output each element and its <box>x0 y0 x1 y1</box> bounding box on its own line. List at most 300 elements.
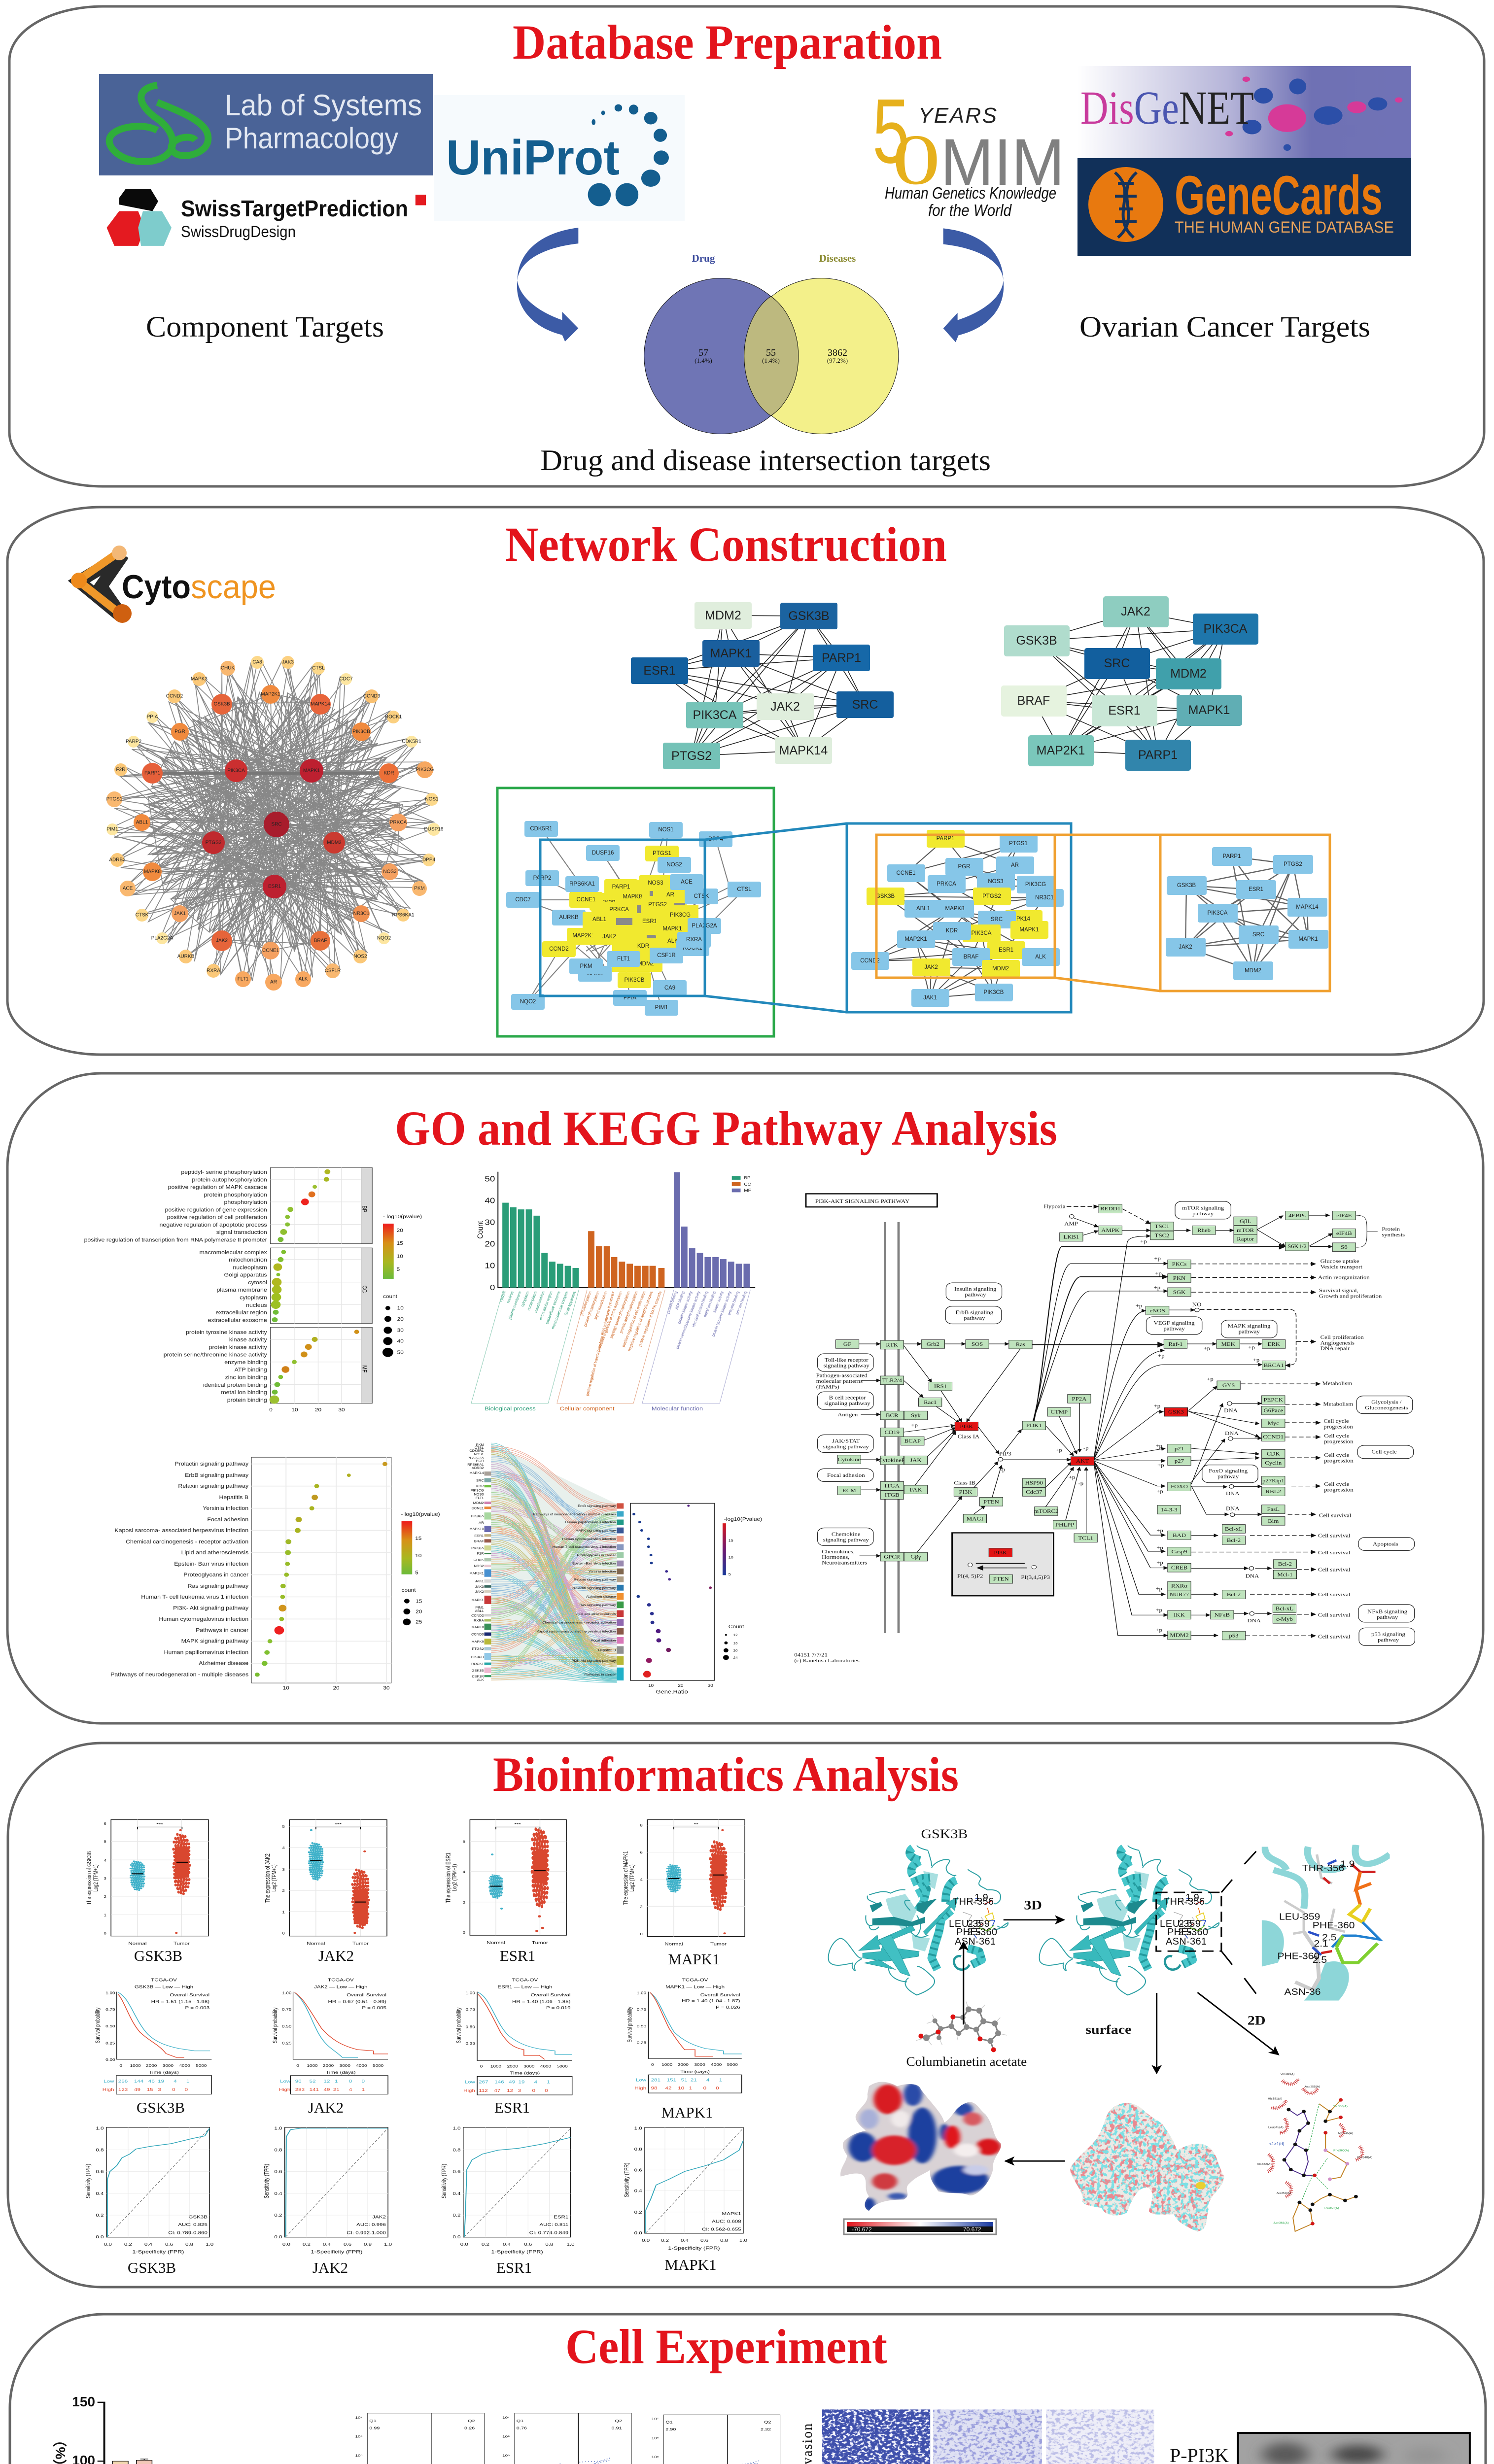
chart: KEGG sankey and dot plot: Pathways of neurodegeneration - multiple diseases <box>533 1513 616 1516</box>
group: KEGG outcome labels: +p <box>1157 1463 1164 1468</box>
chart: flow cytometry plot 2: 10⁷ <box>502 2416 510 2420</box>
chart: GO bar chart: 30 <box>485 1218 495 1227</box>
protein: GSK3B cartoon docked: 1.9 <box>1185 1892 1199 1903</box>
protein: GSK3B cartoon left: PHE-360 <box>956 1927 997 1938</box>
chart: ROC curve MAPK1: MAPK1 <box>722 2212 741 2217</box>
chart: KEGG sankey and dot plot: MAPK8 <box>471 1626 484 1629</box>
group: KEGG outcome labels: +p <box>911 1423 918 1428</box>
chart: mid MCODE network in blue box: BRAF <box>964 954 978 960</box>
group: KEGG outcome labels: Vesicle transport <box>1320 1264 1363 1270</box>
chart: top ten hub network A: PTGS2 <box>671 749 712 763</box>
chart: GO bar chart: Molecular function <box>652 1405 703 1412</box>
chart: GO bubble plot: nucleus <box>246 1302 267 1308</box>
chart: GO bar chart: zinc ion binding <box>734 1291 748 1315</box>
group: KEGG signaling nodes: Bcl-2 <box>1227 1538 1241 1543</box>
group: KEGG outcome labels: Cell cycle <box>1323 1418 1349 1424</box>
chart: full MCODE network in green box: GSK3B <box>597 900 616 906</box>
chart: GO bubble plot: MF <box>361 1366 367 1372</box>
chart: full MCODE network in green box: RXRA <box>686 937 702 943</box>
chart: ROC curve MAPK1: 0.4 <box>681 2238 689 2243</box>
chart: circular PPI network: PGR <box>174 729 185 734</box>
group: KEGG linked pathway boxes: MAPK signaling <box>1228 1323 1271 1329</box>
chart: ROC curve ESR1: 1.0 <box>452 2126 461 2131</box>
chart: flow cytometry plot 3: 10⁵ <box>652 2456 659 2459</box>
chart: ROC curve GSK3B: 0.2 <box>96 2213 104 2218</box>
chart: KEGG sankey and dot plot: Alzheimer disease <box>586 1596 616 1599</box>
legend: electrostatic potential scale: 70.672 <box>963 2226 981 2233</box>
chart: expression scatter JAK2: 1 <box>282 1910 285 1914</box>
group: KEGG outcome labels: PIP3 <box>999 1451 1011 1457</box>
group: KEGG signaling nodes: HSP90 <box>1025 1480 1043 1486</box>
chart: ROC curve JAK2: 1.0 <box>274 2126 282 2131</box>
chart: full MCODE network in green box: ALK <box>667 938 678 944</box>
group: KEGG signaling nodes: MEK <box>1221 1341 1236 1347</box>
group: KEGG outcome labels: +p <box>1154 1285 1160 1291</box>
protein: GSK3B cartoon left: ASN-361 <box>955 1936 996 1947</box>
protein: GSK3B cartoon docked <box>1040 1846 1219 1995</box>
chart: circular PPI network: CDK5R1 <box>402 739 421 744</box>
chart: survival curve MAPK1: Low <box>636 2078 647 2083</box>
captions: gene names under plots: ESR1 <box>500 1947 535 1964</box>
chart: survival curve JAK2: 3000 <box>340 2063 350 2067</box>
group: KEGG signaling nodes: Raf-1 <box>1168 1341 1183 1347</box>
chart: KEGG sankey and dot plot <box>467 1443 762 1695</box>
group: KEGG outcome labels: +p <box>1156 1488 1163 1494</box>
chart: circular PPI network: CSF1R <box>325 968 341 974</box>
group: KEGG signaling nodes: Raptor <box>1237 1236 1254 1242</box>
arrow: disease targets to venn <box>943 228 1004 342</box>
chart: flow cytometry plot 2: 10⁶ <box>502 2435 510 2438</box>
group: KEGG linked pathway boxes: pathway <box>1164 1326 1185 1332</box>
group: KEGG outcome labels: Angiogenesis <box>1320 1340 1355 1346</box>
chart: full MCODE network in green box: ABL1 <box>592 917 606 923</box>
group: KEGG signaling nodes: MDM2 <box>1170 1633 1189 1638</box>
chart: KEGG sankey and dot plot: GSK3B <box>472 1670 484 1673</box>
chart: survival curve GSK3B: GSK3B — Low — High <box>135 1985 193 1989</box>
legend: GO p-value and count: 10 <box>397 1305 404 1311</box>
chart: full MCODE network in green box: FLT1 <box>617 956 630 962</box>
chart: KEGG sankey and dot plot: Kaposi sarcoma-associated herpesvirus infection <box>537 1630 616 1633</box>
chart: expression scatter GSK3B: 3 <box>104 1876 106 1881</box>
chart: expression scatter ESR1: 6 <box>463 1840 465 1844</box>
group: KEGG outcome labels: +p <box>1156 1528 1163 1534</box>
group: KEGG outcome labels: Hypoxia <box>1044 1204 1066 1209</box>
legend: GO p-value and count: 15 <box>397 1241 403 1246</box>
diagram: LigPlot 2D interactions: Val348(A) <box>1281 2073 1295 2076</box>
chart: mid MCODE network in blue box: ALK <box>1035 954 1046 960</box>
chart: full MCODE network in green box: MAPK1 <box>662 926 682 932</box>
group: KEGG signaling nodes: p27 <box>1175 1458 1184 1464</box>
chart: survival curve ESR1: P = 0.019 <box>546 2006 571 2010</box>
chart: circular PPI network: PTGS2 <box>206 840 222 846</box>
chart: GO bubble plot: extracellular region <box>215 1310 267 1316</box>
protein: GSK3B cartoon left: 1.9 <box>974 1892 988 1903</box>
chart: KEGG sankey and dot plot: PKM <box>476 1444 484 1447</box>
captions: gene names under plots: ESR1 <box>496 2259 532 2276</box>
chart: GO bar chart: mitochondrion <box>533 1291 546 1313</box>
arrow: component targets to venn <box>517 228 578 342</box>
chart: ROC curve MAPK1: 0.6 <box>634 2168 642 2173</box>
chart: ROC curve MAPK1: AUC: 0.608 <box>712 2220 741 2224</box>
chart: expression scatter GSK3B: 4 <box>104 1858 106 1862</box>
chart: core network in orange box: PIK3CA <box>1208 910 1228 916</box>
chart: ROC curve MAPK1: Sensitivity (TPR) <box>624 2162 630 2197</box>
chart: GO bubble plot: positive regulation of cell proliferation <box>167 1215 267 1220</box>
chart: survival curve GSK3B: P = 0.003 <box>185 2006 210 2010</box>
chart: circular PPI network: PIK3CB <box>352 729 370 734</box>
chart: circular PPI network: ALK <box>299 977 308 982</box>
panel: GO and KEGG pathway analysis <box>7 1073 1483 1723</box>
chart: ROC curve JAK2: 0.2 <box>303 2242 311 2247</box>
group: KEGG signaling nodes: AMPK <box>1101 1228 1120 1233</box>
panel: network construction <box>7 507 1484 1055</box>
chart: top ten hub network A: SRC <box>852 698 878 712</box>
chart: full MCODE network in green box: NOS3 <box>648 880 663 886</box>
venn diagram: 3862 <box>828 347 847 358</box>
chart: top ten hub network A: PARP1 <box>822 651 861 665</box>
group: KEGG signaling nodes: FOXO <box>1171 1484 1188 1490</box>
chart: PI3K-AKT KEGG signaling pathway map <box>794 1194 1415 1664</box>
chart: KEGG sankey and dot plot: Relaxin signaling pathway <box>574 1578 616 1581</box>
diagram: LigPlot 2D interactions: Asp355(A) <box>1305 2085 1320 2088</box>
chart: core network in orange box: ESR1 <box>1249 887 1263 892</box>
chart: expression scatter JAK2 <box>265 1820 387 1946</box>
group: KEGG outcome labels: +p <box>1156 1545 1163 1551</box>
chart: GO bubble plot: cytoplasm <box>240 1295 267 1300</box>
group: KEGG outcome labels: Metabolism <box>1323 1402 1353 1407</box>
group: KEGG signaling nodes: Bim <box>1268 1518 1279 1524</box>
chart: core network in orange box: SRC <box>1252 932 1264 938</box>
chart: circular PPI network: PKM <box>414 886 425 891</box>
chart: GO bar chart: macromolecular complex <box>551 1291 569 1330</box>
group: KEGG signaling nodes: eIF4E <box>1336 1213 1352 1219</box>
chart: top ten hub network A <box>631 602 894 769</box>
group: KEGG outcome labels: +p <box>1154 1403 1160 1409</box>
group: KEGG signaling nodes: SOS <box>972 1341 983 1347</box>
group: KEGG signaling nodes: GF <box>843 1341 852 1347</box>
chart: survival curve GSK3B: 0.25 <box>105 2041 115 2045</box>
chart: PI3K-AKT KEGG signaling pathway map: PI3K-AKT SIGNALING PATHWAY <box>815 1198 910 1204</box>
chart: GO bar chart: extracellular region <box>538 1291 554 1321</box>
legend: sankey p-value and count: Count <box>729 1624 744 1630</box>
chart: survival curve JAK2: 0 <box>296 2063 299 2067</box>
chart: circular PPI network: FLT1 <box>238 977 249 982</box>
chart: GO bubble plot: kinase activity <box>229 1337 267 1343</box>
chart: survival curve GSK3B: 0.00 <box>105 2057 115 2062</box>
captions: gene names under plots: MAPK1 <box>664 2256 717 2273</box>
chart: GO bubble plot: 20 <box>315 1407 321 1413</box>
group: KEGG outcome labels: Cell proliferation <box>1320 1335 1364 1340</box>
group: KEGG signaling nodes: Bcl-xL <box>1276 1606 1293 1611</box>
chart: ROC curve JAK2: 1.0 <box>384 2242 392 2247</box>
chart: survival curve JAK2: Low <box>280 2079 291 2084</box>
venn diagram: 55 <box>766 347 776 358</box>
group: KEGG linked pathway boxes: pathway <box>1192 1211 1214 1217</box>
legend: sankey p-value and count: 16 <box>733 1641 737 1645</box>
chart: circular PPI network: NOS3 <box>383 869 397 874</box>
chart: KEGG sankey and dot plot: Prolactin signaling pathway <box>572 1587 616 1590</box>
chart: KEGG bubble plot: Epstein- Barr virus infection <box>174 1562 248 1567</box>
group: KEGG outcome labels: -p <box>1000 1467 1006 1472</box>
legend: GO p-value and count: 20 <box>397 1228 403 1233</box>
chart: top ten hub network B: MAP2K1 <box>1037 744 1085 757</box>
group: KEGG signaling nodes: CCND1 <box>1263 1434 1284 1440</box>
group: KEGG signaling nodes: S6K1/2 <box>1287 1244 1307 1249</box>
chart: GO bubble plot: negative regulation of apoptotic process <box>159 1223 267 1228</box>
chart: GO bubble plot: protein autophosphorylation <box>192 1177 267 1183</box>
chart: survival curve ESR1: 0 <box>480 2064 483 2068</box>
chart: circular PPI network: MAPK8 <box>144 869 161 874</box>
chart: GO bubble plot: 30 <box>338 1407 345 1413</box>
chart: circular PPI network: ROCK1 <box>385 715 402 719</box>
label: columbianetin acetate: Columbianetin acetate <box>906 2055 1027 2069</box>
logo: uniprot <box>434 95 685 221</box>
chart: survival curve MAPK1: 5000 <box>727 2062 738 2067</box>
group: KEGG signaling nodes: MAGI <box>967 1516 983 1522</box>
chart: KEGG sankey and dot plot: ErbB signaling pathway <box>578 1505 616 1508</box>
inset: binding site close-up: 1.9 <box>1340 1859 1355 1869</box>
inset: binding site close-up: PHE-360 <box>1313 1920 1355 1931</box>
chart: core network in orange box: MAPK14 <box>1296 904 1319 910</box>
chart: KEGG sankey and dot plot: JAK3 <box>475 1585 484 1589</box>
inset: binding site close-up: THR-356 <box>1302 1863 1344 1874</box>
chart: survival curve MAPK1: 1000 <box>661 2062 672 2067</box>
chart: mid MCODE network in blue box: PGR <box>958 864 970 870</box>
group: KEGG linked pathway boxes <box>818 1201 1415 1645</box>
chart: KEGG sankey and dot plot: BRAF <box>474 1540 484 1543</box>
group: KEGG signaling nodes: RXRα <box>1171 1583 1187 1589</box>
chart: survival curve JAK2: 0.75 <box>282 2007 292 2012</box>
chart: survival curve MAPK1: Survival probability <box>627 2006 633 2042</box>
diagram: LigPlot 2D interactions: Asn361(A) <box>1274 2222 1289 2224</box>
group: KEGG outcome labels: Cell survival <box>1318 1567 1350 1573</box>
group: KEGG linked pathway boxes: signaling pathway <box>824 1363 869 1369</box>
chart: mid MCODE network in blue box: NOS3 <box>988 879 1004 885</box>
chart: GO bar chart: extracellular exosome <box>544 1291 561 1325</box>
chart: mid MCODE network in blue box: KDR <box>946 928 958 934</box>
logo: OMIM 50 years: MIM <box>940 126 1065 199</box>
group: KEGG linked pathway boxes: p53 signaling <box>1371 1631 1405 1637</box>
chart: expression scatter MAPK1: 2 <box>640 1905 643 1909</box>
chart: ROC curve GSK3B: 0.0 <box>96 2235 104 2240</box>
captions: gene names under plots: GSK3B <box>128 2259 176 2276</box>
chart: KEGG sankey and dot plot: F2R <box>477 1552 484 1556</box>
chart: full MCODE network in green box: AR <box>666 892 674 898</box>
chart: circular PPI network: DPP4 <box>422 857 435 862</box>
group: KEGG outcome labels: -p <box>1078 1480 1083 1486</box>
chart: mid MCODE network in blue box: ESR1 <box>999 947 1013 953</box>
chart: KEGG sankey and dot plot: Human T-cell leukemia virus 1 infection <box>553 1546 616 1549</box>
chart: circular PPI network: F2R <box>116 767 125 773</box>
chart: GO bar chart: enzyme binding <box>727 1291 740 1316</box>
chart: survival curve GSK3B: Survival probability <box>95 2007 101 2043</box>
chart: KEGG sankey and dot plot: CDK5R1 <box>469 1449 484 1453</box>
group: KEGG signaling nodes: PDK1 <box>1026 1423 1042 1429</box>
group: KEGG linked pathway boxes: Toll-like receptor <box>825 1357 869 1363</box>
chart: ROC curve JAK2: 0.0 <box>282 2242 290 2247</box>
chart: mid MCODE network in blue box: PARP1 <box>937 836 954 842</box>
chart: KEGG sankey and dot plot: Human papillomavirus infection <box>565 1521 616 1524</box>
venn diagram: (1.4%) <box>695 357 712 364</box>
chart: survival curve ESR1: Low <box>465 2080 476 2085</box>
venn diagram: Diseases <box>819 252 856 264</box>
chart: core network in orange box <box>1160 835 1330 991</box>
chart: ROC curve GSK3B: CI: 0.789-0.860 <box>168 2231 208 2235</box>
dashed box and zoom lines <box>1156 1851 1256 1994</box>
group: KEGG signaling nodes: p21 <box>1175 1446 1184 1452</box>
chart: GO bar chart: Biological process <box>485 1405 536 1412</box>
chart: mid MCODE network in blue box: SRC <box>991 917 1003 923</box>
chart: KEGG sankey and dot plot: KDR <box>476 1485 484 1488</box>
chart: mid MCODE network in blue box: PTGS1 <box>1009 841 1028 847</box>
chart: ROC curve ESR1: 0.2 <box>452 2213 461 2218</box>
chart: survival curve ESR1: TCGA-OV <box>512 1978 538 1983</box>
group: KEGG signaling nodes: PTEN <box>983 1499 1000 1505</box>
group: KEGG signaling nodes: Ras <box>1016 1342 1026 1347</box>
group: KEGG signaling nodes: FasL <box>1267 1506 1280 1512</box>
group: KEGG linked pathway boxes: pathway <box>964 1315 985 1321</box>
chart: circular PPI network: NOS2 <box>353 954 367 959</box>
chart: top ten hub network B: JAK2 <box>1121 605 1150 618</box>
chart: KEGG sankey and dot plot: MAPK10 <box>469 1528 484 1531</box>
legend: GO p-value and count: count <box>383 1294 397 1300</box>
panel: database preparation <box>9 6 1484 486</box>
chart: flow cytometry plot 1: 10⁵ <box>355 2454 363 2457</box>
chart: GO bar chart: protein phosphorylation <box>583 1291 600 1327</box>
title: GO and KEGG pathway analysis: GO and KEGG Pathway Analysis <box>395 1101 1057 1156</box>
chart: expression scatter JAK2: Normal <box>307 1942 325 1946</box>
group: KEGG signaling nodes: Gβγ <box>910 1554 921 1560</box>
group: KEGG outcome labels: +p <box>1155 1627 1162 1633</box>
logo: lab of systems pharmacology: Pharmacology <box>225 122 398 155</box>
chart: KEGG bubble plot: Prolactin signaling pathway <box>175 1462 248 1467</box>
chart: GO bubble plot <box>84 1167 422 1413</box>
chart: survival curve JAK2: Time (days) <box>326 2070 356 2075</box>
chart: survival curve MAPK1: 0.25 <box>637 2041 646 2045</box>
chart: survival curve JAK2: 283 141 49 21 4 1 <box>295 2088 365 2092</box>
chart: top ten hub network A: JAK2 <box>770 700 800 714</box>
chart: full MCODE network in green box: ROCK1 <box>683 945 702 951</box>
chart: KEGG sankey and dot plot: JAK1 <box>475 1580 484 1583</box>
chart: core network in orange box: GSK3B <box>1177 883 1196 889</box>
group: KEGG outcome labels: Cell survival <box>1318 1612 1350 1618</box>
chart: expression scatter ESR1: Log2 (TPM+1) <box>452 1864 458 1891</box>
inset: PI3K PTEN conversion box: PI(4, 5)P2 <box>957 1574 983 1579</box>
group: KEGG outcome labels: progression <box>1324 1458 1354 1464</box>
chart: full MCODE network in green box: ACE <box>681 879 693 885</box>
chart: expression scatter MAPK1: 4 <box>640 1878 643 1882</box>
chart: survival curve ESR1: 267 146 49 19 4 1 <box>479 2080 550 2085</box>
diagram: LigPlot 2D interactions: Leu359(A) <box>1324 2207 1339 2210</box>
legend: sankey p-value and count: 12 <box>733 1633 737 1637</box>
group: KEGG linked pathway boxes: signaling pathway <box>823 1444 869 1450</box>
chart: full MCODE network in green box: CTSK <box>694 893 709 899</box>
chart: KEGG sankey and dot plot: PIK3CA <box>471 1515 484 1518</box>
chart: GO bubble plot: 0 <box>269 1407 273 1413</box>
group: KEGG signaling nodes: BAD <box>1173 1533 1186 1539</box>
chart: survival curve MAPK1: 3000 <box>694 2062 705 2067</box>
chart: ROC curve JAK2: 0.8 <box>274 2148 282 2153</box>
group: KEGG linked pathway boxes: FoxO signaling <box>1209 1468 1248 1474</box>
chart: survival curve JAK2: 1.00 <box>282 1991 292 1995</box>
legend: KEGG p-value and count: 10 <box>415 1553 421 1559</box>
chart: flow cytometry plot 1: 10⁷ <box>355 2416 362 2420</box>
chart: top ten hub network B: GSK3B <box>1016 634 1057 648</box>
chart: circular PPI network: CA8 <box>252 659 262 665</box>
group: KEGG outcome labels: +p <box>1154 1256 1161 1262</box>
inset: PI3K PTEN conversion box <box>952 1533 1053 1596</box>
chart: top ten hub network A: GSK3B <box>788 609 830 623</box>
chart: survival curve JAK2: Overall Survival <box>347 1993 386 1998</box>
chart: GO bar chart <box>471 1172 755 1412</box>
logo: cytoscape: Cyto <box>122 568 191 606</box>
legend: sankey p-value and count <box>723 1517 762 1660</box>
chart: circular PPI network: KDR <box>383 771 394 776</box>
inset: binding site close-up: LEU-359 <box>1279 1912 1320 1922</box>
chart: expression scatter GSK3B <box>86 1820 208 1946</box>
logo: OMIM 50 years: for the World <box>928 201 1012 219</box>
chart: survival curve ESR1: 5000 <box>557 2064 568 2068</box>
chart: mid MCODE network in blue box: PIK3CG <box>1025 882 1046 888</box>
chart: circular PPI network: NQO2 <box>377 935 391 941</box>
chart: mid MCODE network in blue box: MDM2 <box>992 966 1009 972</box>
chart: KEGG sankey and dot plot: AR <box>479 1521 484 1525</box>
chart: GO bar chart: kinase activity <box>712 1291 725 1313</box>
chart: GO bar chart: protein binding <box>665 1291 678 1314</box>
group: KEGG outcome labels: DNA <box>1247 1618 1261 1623</box>
chart: KEGG sankey and dot plot: Hepatitis B <box>598 1649 616 1652</box>
chart: survival curve JAK2: P = 0.005 <box>362 2006 386 2010</box>
chart: flow cytometry plot 2: 10⁵ <box>502 2454 510 2457</box>
chart: expression scatter GSK3B: 6 <box>104 1821 106 1825</box>
chart: circular PPI network: CDC7 <box>339 676 353 682</box>
title: bioinformatics analysis: Bioinformatics Analysis <box>493 1747 959 1802</box>
chart: GO bubble plot: plasma membrane <box>216 1288 267 1293</box>
chart: expression scatter ESR1: 4 <box>463 1870 465 1874</box>
legend: KEGG p-value and count: 20 <box>416 1609 422 1614</box>
chart: mid MCODE network in blue box: JAK1 <box>923 995 937 1001</box>
group: KEGG outcome labels: progression <box>1324 1438 1354 1444</box>
chart: full MCODE network in green box: CTSL <box>737 887 752 892</box>
group: KEGG outcome labels: +p <box>1136 1303 1142 1308</box>
chart: GO bar chart: cytoplasm <box>520 1291 530 1307</box>
chart: survival curve ESR1: 0.25 <box>465 2041 475 2046</box>
group: KEGG signaling nodes: PKN <box>1173 1275 1186 1281</box>
chart: expression scatter GSK3B: The expression of GSK3B <box>86 1851 93 1905</box>
chart: ROC curve JAK2: CI: 0.992-1.000 <box>347 2231 386 2235</box>
chart: survival curve ESR1: 112 47 12 3 0 0 <box>479 2088 548 2093</box>
chart: GO bar chart: positive regulation of cell proliferation <box>621 1291 647 1347</box>
group: KEGG signaling nodes: LKB1 <box>1063 1234 1079 1240</box>
chart: GO bar chart: 50 <box>485 1174 495 1183</box>
chart: full MCODE network in green box: MDM2 <box>637 961 654 967</box>
chart: core network in orange box: PARP1 <box>1223 854 1241 859</box>
group: KEGG outcome labels: +p <box>1155 1443 1162 1449</box>
chart: KEGG sankey and dot plot: CCND2 <box>471 1614 484 1617</box>
group: KEGG signaling nodes: TSC2 <box>1155 1233 1170 1238</box>
protein: GSK3B cartoon docked: 2.5 <box>1179 1918 1192 1929</box>
chart: expression scatter GSK3B: Normal <box>128 1942 146 1946</box>
legend: sankey p-value and count: 20 <box>733 1648 737 1652</box>
chart: KEGG sankey and dot plot: Proteoglycans in cancer <box>577 1554 616 1557</box>
group: KEGG outcome labels: DNA <box>1225 1431 1239 1437</box>
chart: ROC curve MAPK1: 0.0 <box>634 2231 642 2236</box>
chart: top ten hub network A: MAPK14 <box>779 744 828 757</box>
chart: survival curve MAPK1: 0 <box>651 2062 654 2067</box>
group: KEGG linked pathway boxes: pathway <box>1217 1474 1239 1479</box>
chart: GO bar chart: positive regulation of gene expression <box>597 1291 623 1349</box>
chart: survival curve MAPK1: 281 151 51 21 4 1 <box>651 2078 723 2083</box>
